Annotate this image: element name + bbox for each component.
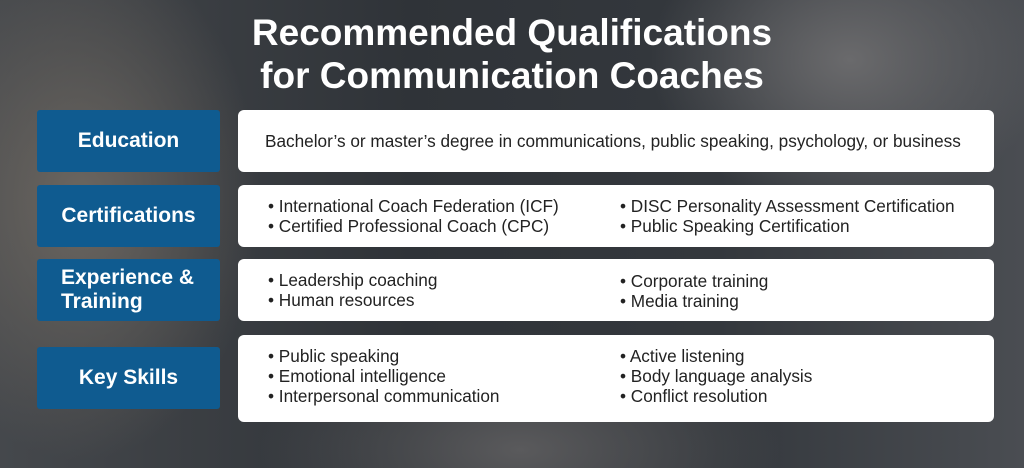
panel: certifications: • International Coach Federation (ICF)	[268, 196, 559, 216]
label: Key Skills	[37, 347, 220, 409]
label: Certifications	[37, 185, 220, 247]
panel: experience: • Corporate training	[620, 271, 768, 291]
panel: certifications: • Public Speaking Certification	[620, 216, 850, 236]
label: Education	[37, 110, 220, 172]
panel: certifications	[238, 185, 994, 247]
panel: education	[238, 110, 994, 172]
panel: certifications: • DISC Personality Assessment Certification	[620, 196, 955, 216]
panel: experience	[238, 259, 994, 321]
title: Recommended Qualifications	[252, 12, 772, 53]
panel: education: Bachelor’s or master’s degree in communications, public speaking, psychology, or business	[265, 131, 961, 151]
panel: experience: • Human resources	[268, 290, 414, 310]
label: Certifications: Certifications	[61, 204, 196, 227]
title	[252, 12, 772, 96]
panel: key skills: • Conflict resolution	[620, 386, 767, 406]
panel: experience: • Leadership coaching	[268, 270, 437, 290]
label: Experience & Training: Experience &	[61, 266, 194, 289]
panel: experience: • Media training	[620, 291, 739, 311]
label: Education: Education	[78, 129, 179, 152]
panel: key skills: • Active listening	[620, 346, 744, 366]
label: Key Skills: Key Skills	[79, 366, 178, 389]
title: for Communication Coaches	[260, 55, 764, 96]
panel: certifications: • Certified Professional Coach (CPC)	[268, 216, 549, 236]
panel: key skills: • Public speaking	[268, 346, 399, 366]
label: Experience & Training: Training	[61, 290, 143, 313]
panel: key skills	[238, 335, 994, 422]
panel: key skills: • Body language analysis	[620, 366, 812, 386]
panel: key skills: • Emotional intelligence	[268, 366, 446, 386]
panel: key skills: • Interpersonal communication	[268, 386, 499, 406]
label: Experience & Training	[37, 259, 220, 321]
